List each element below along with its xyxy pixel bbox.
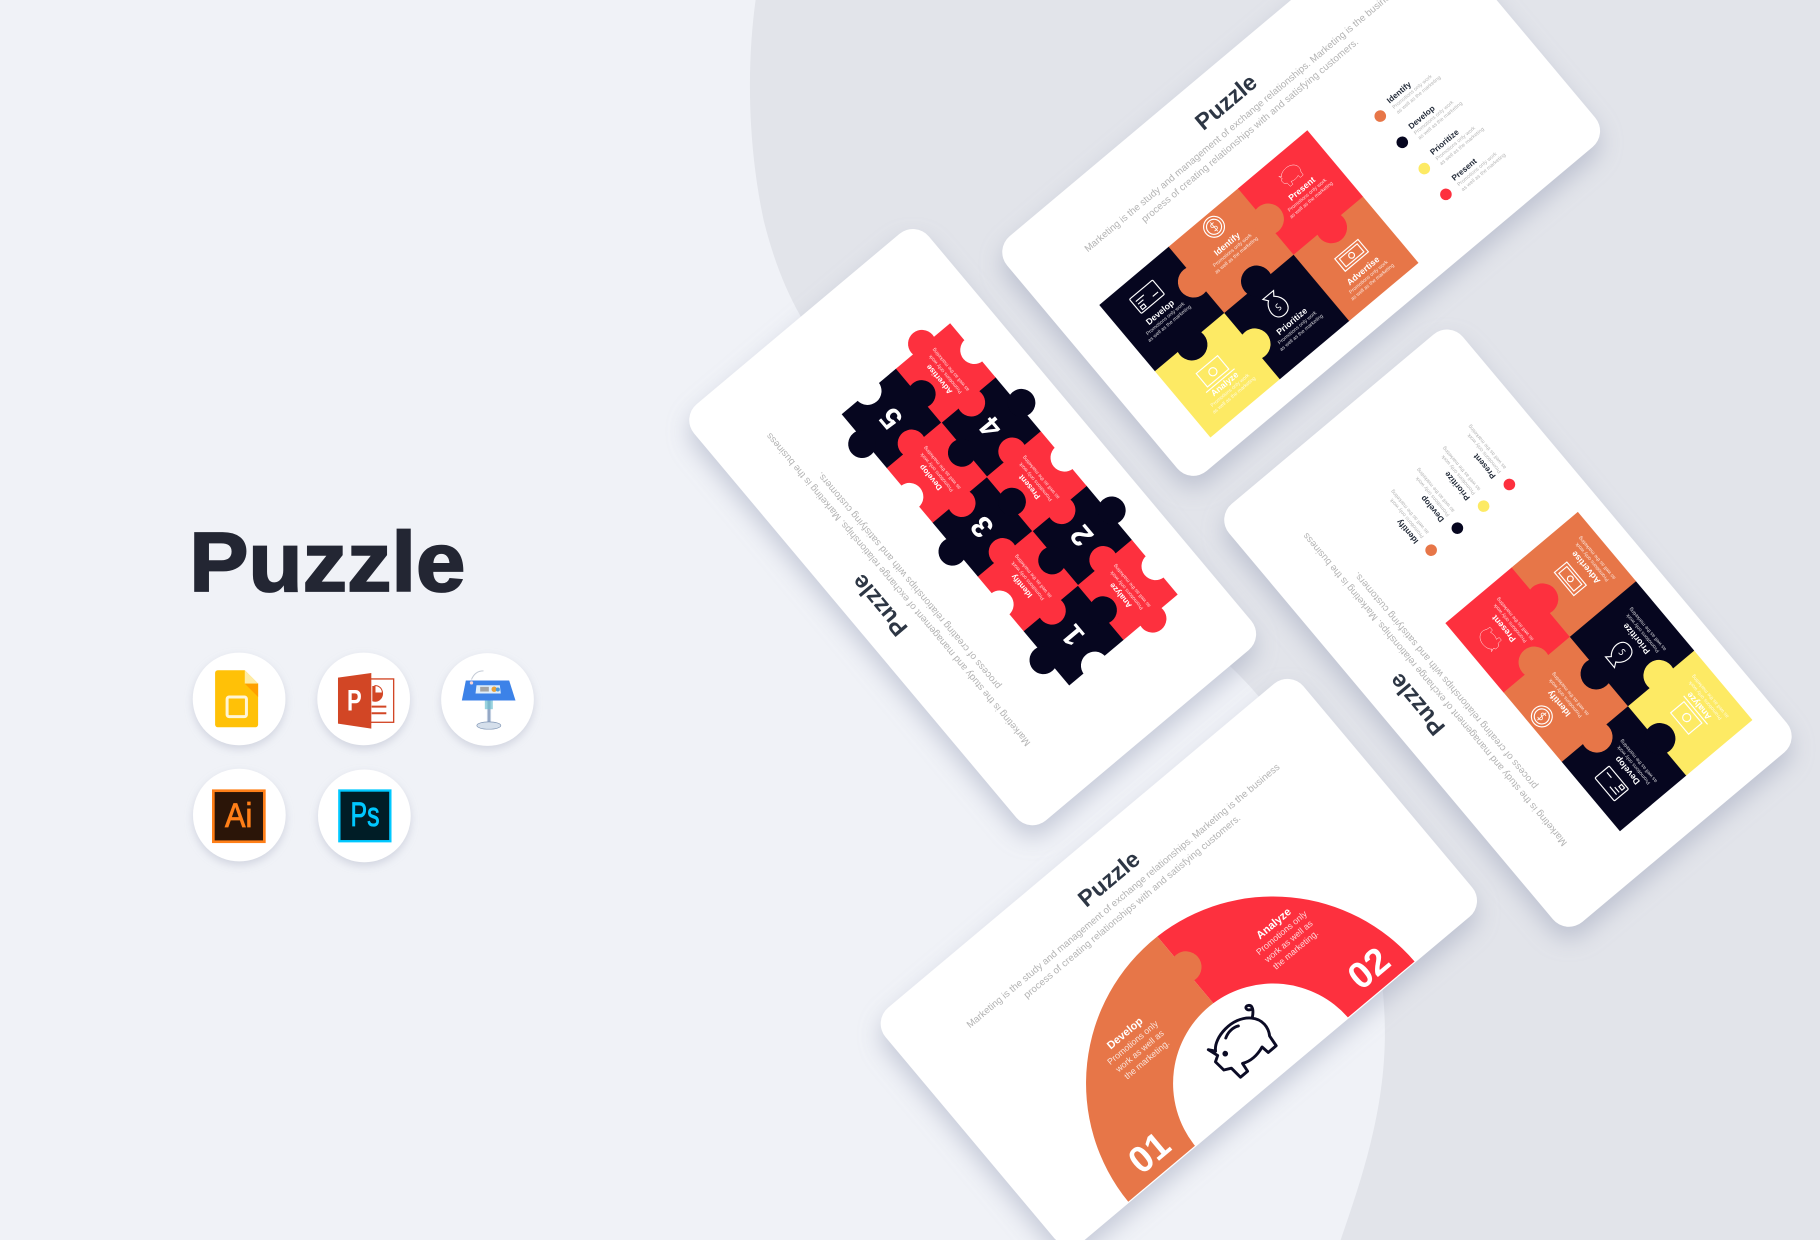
tile: Identify: Identify: [1212, 230, 1242, 258]
description: Marketing is the study and management of exchange relationships. Marketing is the business: [764, 430, 1033, 748]
step: Identify: Identify: [1009, 572, 1034, 600]
description: Marketing is the study and management of exchange relationships. Marketing is the business: [1301, 530, 1570, 848]
legend: Develop: [1407, 104, 1437, 131]
tile: Prioritize: Prioritize: [1274, 305, 1309, 337]
tile: Prioritize: as well as the marketing: [1628, 606, 1668, 652]
puzzle grid: [1445, 512, 1752, 831]
puzzle grid: [1099, 130, 1419, 437]
heading: Puzzle: [846, 569, 913, 641]
heading: Puzzle: [1190, 69, 1262, 135]
segment: Analyze: [1246, 878, 1398, 1033]
tile: Present: as well as the marketing: [1496, 596, 1535, 642]
legend: as well as the marketing: [1467, 423, 1508, 470]
tile: Analyze: [1187, 346, 1257, 415]
tile: Advertise: Promotions only work: [1574, 541, 1610, 582]
tile: Prioritize: Promotions only work: [1277, 310, 1318, 346]
tile: Present: [1264, 151, 1335, 220]
icon: Photoshop: Ps: [351, 796, 380, 834]
legend: as well as the marketing: [1417, 101, 1464, 141]
step: Develop: [910, 445, 962, 501]
segment: Develop: 01: [1120, 1123, 1178, 1182]
tile: Identify: [1517, 671, 1591, 745]
segment: Develop: Promotions only: [1105, 1018, 1161, 1067]
tile: Present: Promotions only work: [1287, 177, 1328, 213]
tile: Analyze: Promotions only work: [1210, 372, 1251, 409]
step: Advertise: as well as the marketing: [931, 346, 971, 392]
tile: Develop: as well as the marketing: [1619, 738, 1659, 784]
puzzle strip: [818, 300, 1201, 709]
tile: Advertise: [1325, 232, 1396, 302]
numbers: [873, 355, 1146, 652]
tile: Prioritize: Prioritize: [1620, 621, 1652, 656]
tile: Advertise: Advertise: [1345, 254, 1381, 287]
step: Develop: Promotions only work: [919, 451, 955, 493]
legend: [1377, 423, 1521, 561]
tile: Develop: [1587, 738, 1659, 810]
segment: Develop: the marketing.: [1122, 1038, 1171, 1081]
panel: slide with 6-piece puzzle grid: [994, 0, 1609, 484]
legend: Promotions only work: [1413, 99, 1455, 136]
step: Analyze: Promotions only work: [1109, 569, 1145, 611]
panel: slide with half-ring chart: [872, 670, 1486, 1240]
legend: as well as the marketing: [1441, 445, 1482, 492]
icon: Keynote: [441, 653, 534, 746]
icon: Google Slides: [193, 653, 285, 745]
icon: Photoshop: [318, 770, 411, 862]
legend: as well as the marketing: [1461, 152, 1507, 193]
description: process of creating relationships with and satisfying customers.: [815, 470, 1004, 691]
legend: Promotions only work: [1389, 497, 1426, 539]
tile: Develop: as well as the marketing: [1147, 304, 1193, 344]
step: Analyze: [1100, 563, 1152, 619]
heading: Puzzle: [1384, 668, 1450, 741]
icon: PowerPoint: [317, 653, 410, 745]
segment: Develop: work as well as: [1113, 1028, 1166, 1075]
tile: Advertise: as well as the marketing: [1577, 535, 1617, 580]
tile: Present: as well as the marketing: [1289, 180, 1335, 220]
tile: Present: Present: [1286, 175, 1317, 203]
description: Marketing is the study and management of exchange relationships. Marketing is the business: [965, 762, 1282, 1031]
step: Present: [1009, 454, 1061, 511]
legend: Prioritize: [1442, 469, 1472, 502]
legend: Develop: [1419, 494, 1446, 524]
legend: Promotions only work: [1456, 151, 1499, 188]
tile: Identify: as well as the marketing: [1551, 671, 1591, 717]
tile: Identify: [1186, 202, 1260, 276]
tile: Advertise: as well as the marketing: [1350, 262, 1396, 302]
segment: Develop: [1061, 1008, 1232, 1182]
segment: Analyze: 02: [1339, 939, 1398, 997]
tile: Prioritize: [1592, 606, 1668, 682]
panel: slide with 5-step puzzle strip: [681, 220, 1265, 834]
numbers: 2: [1064, 518, 1100, 552]
legend: Promotions only work: [1435, 125, 1477, 162]
tile: Advertise: [1547, 535, 1617, 606]
segment: Analyze: the marketing.: [1271, 928, 1320, 972]
step: Analyze: Analyze: [1107, 581, 1134, 610]
tile: Prioritize: Promotions only work: [1625, 612, 1661, 653]
heading: Puzzle: [1073, 846, 1145, 912]
description: process of creating relationships with and satisfying customers.: [1352, 569, 1540, 791]
step: Present: Promotions only work: [1018, 461, 1054, 502]
panel: rotated slide with 6-piece puzzle grid: [1216, 321, 1800, 935]
step: Advertise: Promotions only work: [928, 353, 964, 394]
legend: Promotions only work: [1415, 475, 1451, 517]
legend: as well as the marketing: [1390, 488, 1431, 535]
icon: PowerPoint: P: [347, 685, 362, 718]
numbers: 5: [873, 401, 909, 435]
legend: Prioritize: [1428, 127, 1461, 157]
tile: Prioritize: as well as the marketing: [1279, 313, 1325, 353]
legend: Present: [1450, 156, 1479, 183]
description: process of creating relationships with and satisfying customers.: [1140, 37, 1361, 225]
tile: Develop: [1120, 272, 1193, 344]
tile: Advertise: Advertise: [1569, 549, 1602, 586]
legend: Promotions only work: [1440, 453, 1477, 496]
tile: Present: [1466, 596, 1535, 666]
tile: Develop: Develop: [1613, 754, 1642, 787]
description: process of creating relationships with and satisfying customers.: [1022, 813, 1243, 1001]
step: Present: as well as the marketing: [1021, 454, 1061, 500]
step: Present: Present: [1017, 473, 1042, 501]
icon: piggy bank: [1201, 1004, 1282, 1083]
tile: Advertise: Promotions only work: [1348, 259, 1390, 295]
numbers: 1: [1055, 618, 1092, 652]
step: Develop: as well as the marketing: [923, 445, 962, 490]
tile: Develop: Promotions only work: [1145, 301, 1187, 337]
tile: Present: Present: [1490, 613, 1518, 644]
tile: Prioritize: [1248, 277, 1325, 353]
tile: Analyze: Analyze: [1209, 369, 1240, 398]
tile: Present: Promotions only work: [1492, 602, 1529, 644]
legend: as well as the marketing: [1396, 75, 1442, 115]
legend: Identify: [1385, 79, 1413, 105]
step: Develop: Develop: [917, 463, 944, 492]
step: Advertise: Advertise: [924, 362, 954, 396]
tile: Analyze: as well as the marketing: [1691, 673, 1730, 719]
tile: Analyze: Promotions only work: [1687, 679, 1724, 721]
step: Identify: Promotions only work: [1010, 560, 1046, 601]
tile: Analyze: [1661, 673, 1730, 744]
app icons: [193, 653, 534, 862]
segment: Develop: Develop: [1105, 1015, 1146, 1052]
step: Identify: as well as the marketing: [1014, 553, 1053, 599]
legend: Promotions only work: [1466, 432, 1503, 474]
step: Analyze: as well as the marketing: [1113, 563, 1152, 608]
legend: Identify: [1395, 517, 1420, 545]
tile: Identify: Promotions only work: [1212, 233, 1254, 269]
tile: Analyze: as well as the marketing: [1212, 376, 1257, 415]
title: Puzzle: [189, 515, 465, 609]
step: Identify: [1001, 553, 1053, 610]
segment: Analyze: Promotions only: [1254, 908, 1309, 957]
legend: Present: [1471, 452, 1498, 480]
numbers: 4: [973, 409, 1009, 444]
numbers: 3: [964, 509, 1001, 544]
icon: Illustrator: [193, 769, 286, 861]
tile: Analyze: Analyze: [1684, 690, 1713, 722]
tile: Develop: Develop: [1144, 298, 1176, 327]
tile: Identify: Promotions only work: [1548, 677, 1584, 718]
step: Advertise: [918, 346, 971, 403]
tile: Develop: Promotions only work: [1616, 744, 1652, 785]
tile: Identify: Identify: [1545, 688, 1573, 719]
legend: [1369, 62, 1507, 206]
segment: Analyze: work as well as: [1262, 918, 1315, 965]
legend: as well as the marketing: [1416, 466, 1456, 513]
icon: Illustrator: Ai: [225, 797, 252, 835]
legend: as well as the marketing: [1439, 126, 1486, 167]
segment: Analyze: Analyze: [1254, 906, 1294, 942]
half-ring chart: [1010, 820, 1415, 1202]
legend: Promotions only work: [1391, 74, 1434, 111]
tile: Identify: as well as the marketing: [1214, 236, 1260, 276]
